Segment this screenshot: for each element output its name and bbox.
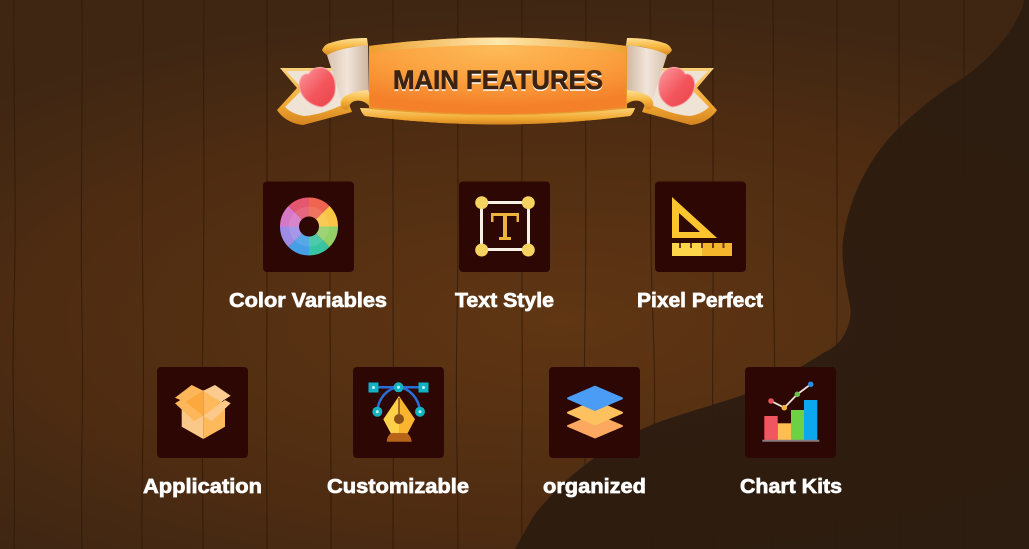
label: Application (143, 476, 262, 498)
feature: Pixel Perfect (637, 182, 763, 312)
card (745, 367, 836, 458)
card (459, 182, 550, 272)
title text shadow: MAIN FEATURES (393, 66, 603, 96)
right ribbon tail (642, 68, 717, 125)
icon: layers (568, 387, 622, 438)
feature: Color Variables (229, 182, 387, 312)
icon: open box (175, 385, 231, 439)
label: Text Style (455, 290, 554, 312)
heart right (659, 67, 695, 107)
feature: organized (543, 367, 646, 498)
feature: Chart Kits (740, 367, 842, 498)
dark curved background shape (515, 0, 1029, 549)
left ribbon tail (277, 68, 352, 125)
heart left (299, 67, 335, 107)
feature: Customizable (327, 367, 469, 498)
label: organized (543, 476, 646, 498)
feature: Application (143, 367, 262, 498)
icon: bar and line chart (762, 382, 819, 441)
label: Chart Kits (740, 476, 842, 498)
label: Customizable (327, 476, 469, 498)
icon: ruler and set square (672, 197, 732, 256)
card (157, 367, 248, 458)
card (549, 367, 640, 458)
icon: text box (475, 196, 535, 256)
title text: MAIN FEATURES (393, 65, 603, 95)
title banner (277, 38, 717, 125)
card (263, 182, 354, 272)
ribbon centre (360, 38, 635, 124)
card (655, 182, 746, 272)
label: Pixel Perfect (637, 290, 763, 312)
icon: pen tool (368, 382, 428, 442)
card (353, 367, 444, 458)
icon: color wheel (281, 199, 337, 254)
left ribbon roll (322, 38, 370, 110)
label: Color Variables (229, 290, 387, 312)
feature: Text Style (455, 182, 554, 312)
right ribbon roll (624, 38, 672, 110)
